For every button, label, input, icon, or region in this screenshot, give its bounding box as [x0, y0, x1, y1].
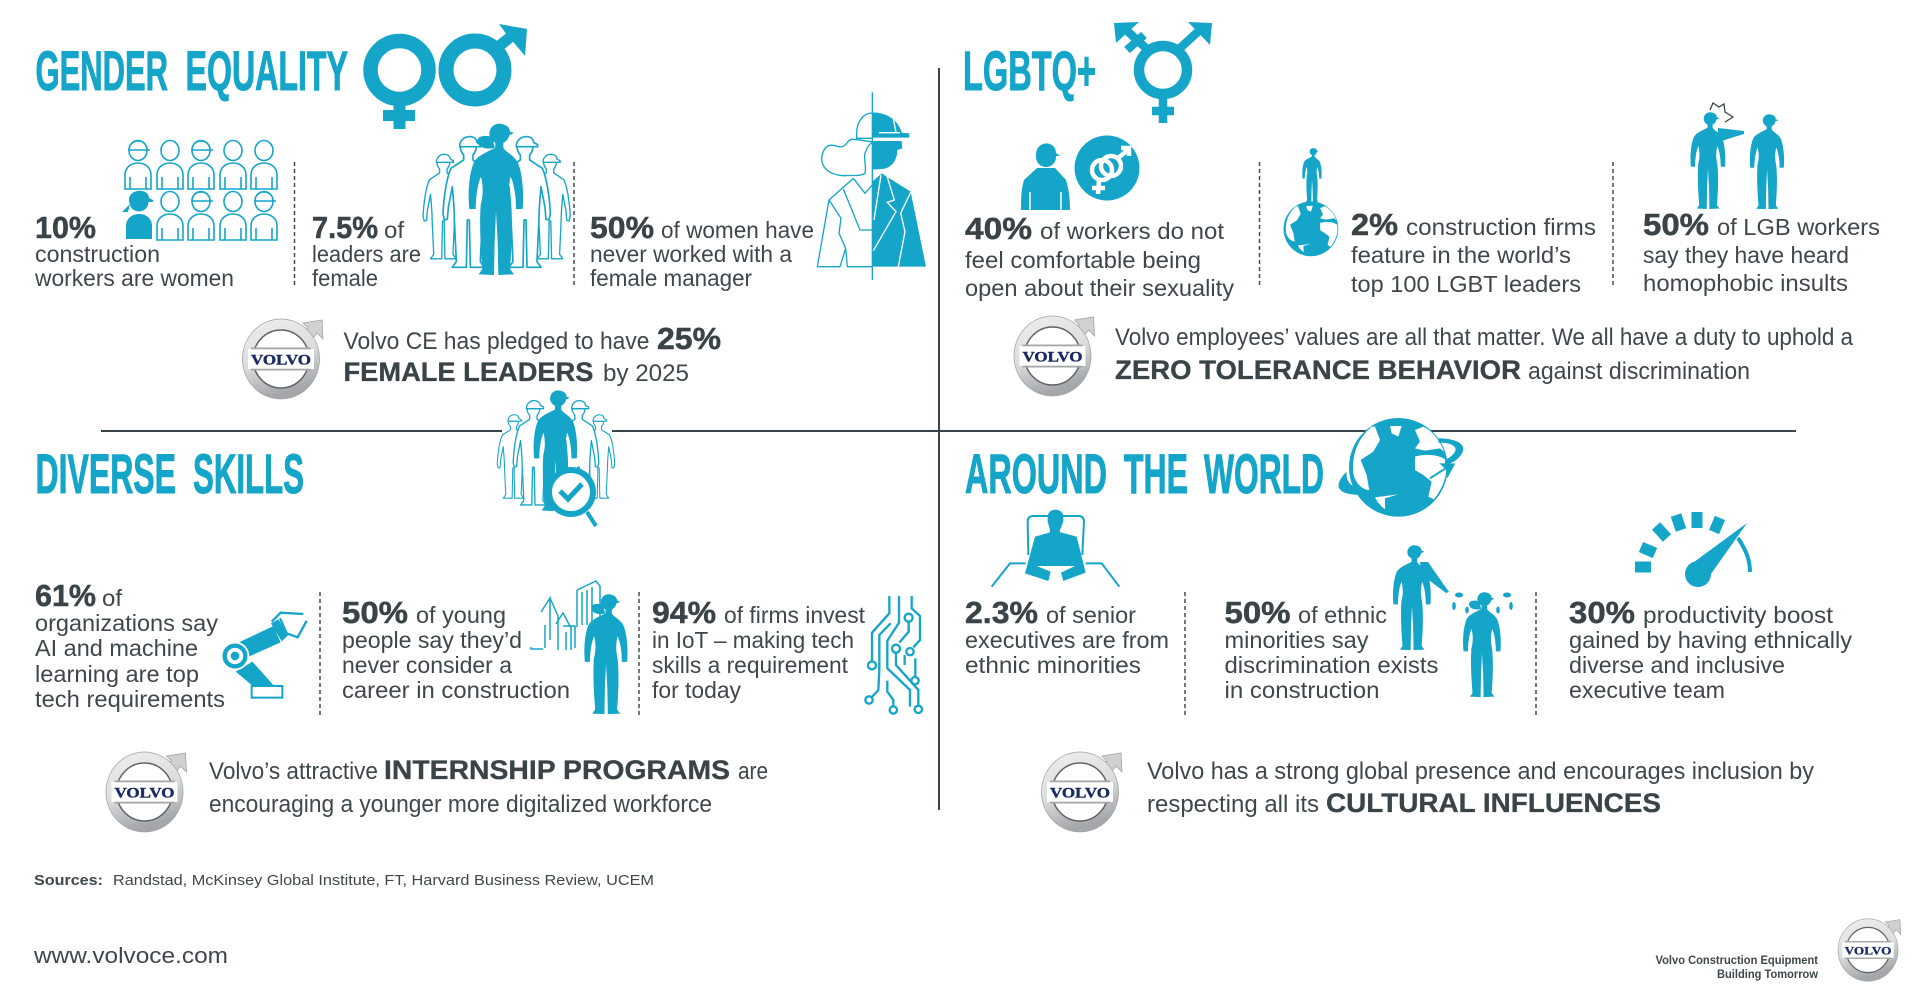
stat: 50 percent of LGB workers	[1643, 207, 1880, 296]
stat: 2.3 percent	[965, 595, 1169, 678]
icon: volvo logo	[1042, 752, 1122, 832]
icon: speedometer gauge	[1635, 512, 1750, 587]
stat: 2.3 percent: executives are from	[965, 627, 1169, 653]
icon: half woman half man	[817, 92, 926, 280]
stat: 94 percent of firms: in IoT – making tech	[652, 627, 854, 653]
website url: www.volvoce.com	[33, 943, 228, 968]
stat: 7.5 percent: leaders are	[312, 241, 421, 267]
stat: 50 percent of ethnic minorities: 50%	[1224, 595, 1290, 630]
callout: volvo female leaders pledge: FEMALE LEADERS	[344, 357, 594, 387]
stat: 50 percent of women: never worked with a	[590, 241, 792, 267]
footer brand: volvo construction equipment: Building Tomorrow	[1717, 967, 1819, 981]
stat: 30 percent productivity: diverse and inclusive	[1569, 652, 1785, 678]
icon: volvo logo	[1838, 919, 1901, 981]
stat: 7.5 percent: of	[384, 217, 405, 243]
callout: zero tolerance: ZERO TOLERANCE BEHAVIOR	[1115, 355, 1521, 385]
stat: 2.3 percent: ethnic minorities	[965, 652, 1141, 678]
stat: 40 percent of workers: open about their sexuality	[965, 275, 1235, 301]
stat: 50 percent of LGB workers: 50%	[1643, 207, 1709, 242]
icon: person pointing at another person	[1690, 103, 1784, 209]
icon: person standing on globe	[1284, 148, 1338, 256]
stat: 94 percent of firms: of firms invest	[724, 602, 866, 628]
stat: 30 percent productivity: 30%	[1569, 595, 1635, 630]
sources: Sources:	[34, 872, 103, 889]
stat: 2.3 percent: of senior	[1046, 602, 1136, 628]
stat: 50 percent of LGB workers: homophobic insults	[1643, 270, 1848, 296]
callout: zero tolerance	[1014, 316, 1854, 396]
callout: internship programs	[106, 752, 768, 832]
stat: 50 percent of women: female manager	[590, 265, 752, 291]
stat: 2 percent of firms: construction firms	[1406, 214, 1596, 240]
icon: female leader with workers	[423, 124, 570, 275]
stat: 7.5 percent: 7.5%	[312, 210, 378, 245]
stat: 50 percent of ethnic minorities: of ethnic	[1298, 602, 1387, 628]
icon: workers with magnifying glass	[497, 390, 615, 526]
title: LGBTQ+: LGBTQ+	[963, 39, 1096, 102]
title: diverse skills: SKILLS	[193, 442, 304, 505]
stat: 50 percent of LGB workers: say they have heard	[1643, 242, 1849, 268]
title: diverse skills: DIVERSE	[36, 442, 176, 505]
stat: 7.5 percent: female	[312, 265, 378, 291]
stat: 61 percent: of	[102, 585, 123, 611]
stat: 40 percent of workers: 40%	[965, 211, 1032, 246]
stat: 7.5 percent	[312, 210, 421, 291]
stat: 40 percent of workers: of workers do not	[1040, 218, 1225, 244]
divider lines	[101, 68, 1796, 810]
icon: transgender symbol	[1114, 22, 1212, 123]
panel: LGBTQ+	[963, 22, 1880, 396]
icon: volvo logo	[242, 319, 323, 399]
icon: man pointing at crying woman	[1393, 545, 1513, 697]
icon: volvo logo: VOLVO	[114, 786, 174, 802]
sources: Randstad, McKinsey Global Institute, FT, Harvard Business Review, UCEM	[113, 872, 654, 889]
stat: 2 percent of firms: top 100 LGBT leaders	[1351, 271, 1581, 297]
stat: 10 percent: workers are women	[34, 265, 234, 291]
stat: 2 percent of firms	[1351, 207, 1596, 297]
title: around the world: AROUND	[965, 442, 1107, 505]
icon: volvo logo: VOLVO	[251, 352, 311, 368]
icon: volvo logo: VOLVO	[1050, 786, 1110, 802]
callout: zero tolerance: Volvo employees’ values are all that matter. We all have a duty to uphold a	[1115, 324, 1854, 351]
stat: 30 percent productivity: executive team	[1569, 677, 1725, 703]
icon: robot arm	[221, 613, 307, 698]
stat: 50 percent of young people: never consider a	[342, 652, 512, 678]
title: around the world: THE	[1124, 442, 1188, 505]
stat: 94 percent of firms: for today	[652, 677, 741, 703]
title: gender equality: GENDER	[36, 39, 168, 102]
stat: 94 percent of firms: 94%	[652, 595, 716, 630]
stat: 30 percent productivity: gained by having ethnically	[1569, 627, 1852, 653]
icon: circuit board lines	[865, 596, 922, 714]
callout: cultural influences: CULTURAL INFLUENCES	[1326, 788, 1661, 818]
stat: 50 percent of young people: 50%	[342, 595, 408, 630]
icon: volvo logo: VOLVO	[1022, 350, 1082, 366]
stat: 50 percent of ethnic minorities: minorities say	[1224, 627, 1369, 653]
stat: 40 percent of workers: feel comfortable being	[965, 247, 1201, 273]
stat: 50 percent of young people: people say they’d	[342, 627, 522, 653]
stat: 50 percent of ethnic minorities: discrimination exists	[1224, 652, 1438, 678]
stat: 61 percent: 61%	[35, 578, 96, 613]
icon: volvo logo: VOLVO	[1845, 944, 1891, 957]
callout: internship programs: INTERNSHIP PROGRAMS	[384, 755, 730, 785]
stat: 61 percent: AI and machine	[35, 635, 198, 661]
callout: zero tolerance: against discrimination	[1528, 358, 1750, 385]
stat: 50 percent of women: of women have	[661, 217, 814, 243]
stat: 10 percent: 10%	[35, 210, 96, 245]
stat: 50 percent of women	[590, 210, 814, 291]
icon: globe with orbit arrow	[1339, 418, 1463, 517]
stat: 50 percent of ethnic minorities: in construction	[1224, 677, 1380, 703]
panel: gender equality	[34, 24, 926, 399]
title: gender equality: EQUALITY	[186, 39, 348, 102]
callout: cultural influences: respecting all its	[1147, 791, 1319, 818]
stat: 61 percent: tech requirements	[35, 686, 225, 712]
callout: volvo female leaders pledge: by 2025	[603, 360, 689, 387]
stat: 2.3 percent: 2.3%	[965, 595, 1038, 630]
icon: venus and mars symbols	[370, 24, 527, 129]
stat: 50 percent of women: 50%	[590, 210, 654, 245]
stat: 50 percent of young people	[342, 595, 570, 703]
footer brand: volvo construction equipment	[1656, 919, 1901, 981]
callout: volvo female leaders pledge	[242, 319, 721, 399]
footer brand: volvo construction equipment: Volvo Construction Equipment	[1656, 953, 1818, 967]
callout: internship programs: encouraging a younger more digitalized workforce	[209, 791, 712, 818]
panel: around the world	[965, 418, 1852, 832]
stat: 61 percent: learning are top	[35, 661, 199, 687]
icon: worker and sexuality symbols	[1021, 136, 1140, 210]
panel: diverse skills	[35, 390, 922, 832]
stat: 2 percent of firms: 2%	[1351, 207, 1398, 242]
callout: volvo female leaders pledge: 25%	[657, 321, 721, 356]
callout: volvo female leaders pledge: Volvo CE has pledged to have	[344, 328, 650, 355]
title: around the world	[965, 442, 1324, 505]
stat: 94 percent of firms: skills a requirement	[652, 652, 849, 678]
stat: 50 percent of young people: career in construction	[342, 677, 570, 703]
callout: cultural influences	[1042, 752, 1814, 832]
callout: internship programs: Volvo’s attractive	[209, 758, 378, 785]
stat: 2 percent of firms: feature in the world’s	[1351, 242, 1571, 268]
icon: executive at desk	[992, 510, 1119, 587]
stat: 50 percent of ethnic minorities	[1224, 595, 1438, 703]
stat: 61 percent: organizations say	[35, 610, 219, 636]
callout: cultural influences: Volvo has a strong global presence and encourages inclusion by	[1147, 758, 1814, 785]
icon: grid of workers, one in ten highlighted	[122, 140, 277, 240]
title: around the world: WORLD	[1204, 442, 1324, 505]
icon: volvo logo	[106, 752, 186, 832]
stat: 94 percent of firms	[652, 595, 866, 703]
stat: 30 percent productivity: productivity boost	[1643, 602, 1834, 628]
stat: 50 percent of young people: of young	[416, 602, 506, 628]
stat: 61 percent	[35, 578, 225, 712]
icon: woman with city buildings	[531, 581, 628, 714]
stat: 40 percent of workers	[965, 211, 1235, 301]
stat: 10 percent: construction	[35, 241, 160, 267]
stat: 50 percent of LGB workers: of LGB workers	[1717, 214, 1880, 240]
stat: 10 percent	[34, 210, 234, 291]
icon: volvo logo	[1014, 316, 1094, 396]
stat: 30 percent productivity	[1569, 595, 1852, 703]
callout: internship programs: are	[738, 758, 768, 785]
